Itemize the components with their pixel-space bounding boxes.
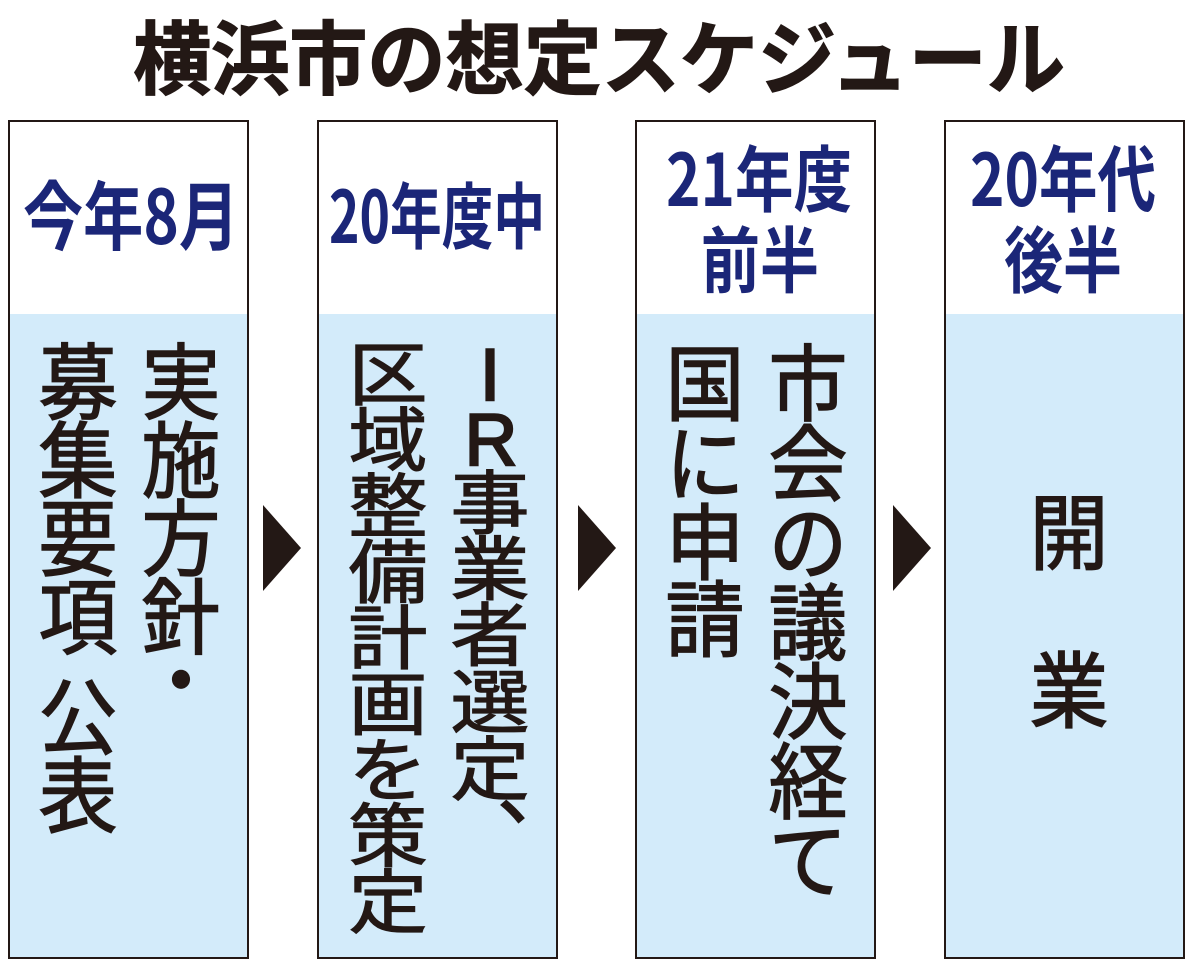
text: IR事業者選定、: I <box>480 335 500 416</box>
text: IR事業者選定、: R <box>465 400 517 481</box>
text: 区域整備計画を策定: 区域整備計画を策定 <box>349 320 427 947</box>
heading: 20年代: 20年代 <box>970 122 1156 227</box>
text: IR事業者選定、: 、 <box>497 726 576 841</box>
text: 募集要項 公表: 募集要項公表 <box>39 317 117 851</box>
heading: 今年8月: 今年8月 <box>23 157 239 266</box>
text: IR事業者選定、 <box>451 335 576 841</box>
text: 国に申請: 国に申請 <box>666 319 744 675</box>
text: IR事業者選定、: 事業者選定 <box>451 449 529 814</box>
heading: 20年度中: 20年度中 <box>329 159 545 264</box>
panel: 今年8月 <box>9 121 248 958</box>
text: 開業: 開業 <box>1030 468 1108 746</box>
arrow 1 <box>263 505 301 591</box>
heading: 21年度: 21年度 <box>666 122 852 227</box>
arrow 3 <box>893 505 931 591</box>
panel: 20年度中 <box>318 121 576 958</box>
text: 市会の議決経て: 市会の議決経て <box>769 319 847 916</box>
text: 実施方針・: 実施方針・ <box>142 317 220 735</box>
panel: 21年度前半 <box>636 121 875 958</box>
heading: 前半: 前半 <box>701 203 819 308</box>
arrow 2 <box>578 505 616 591</box>
panel: 20年代後半 <box>945 121 1184 958</box>
heading: 後半: 後半 <box>1004 203 1122 308</box>
